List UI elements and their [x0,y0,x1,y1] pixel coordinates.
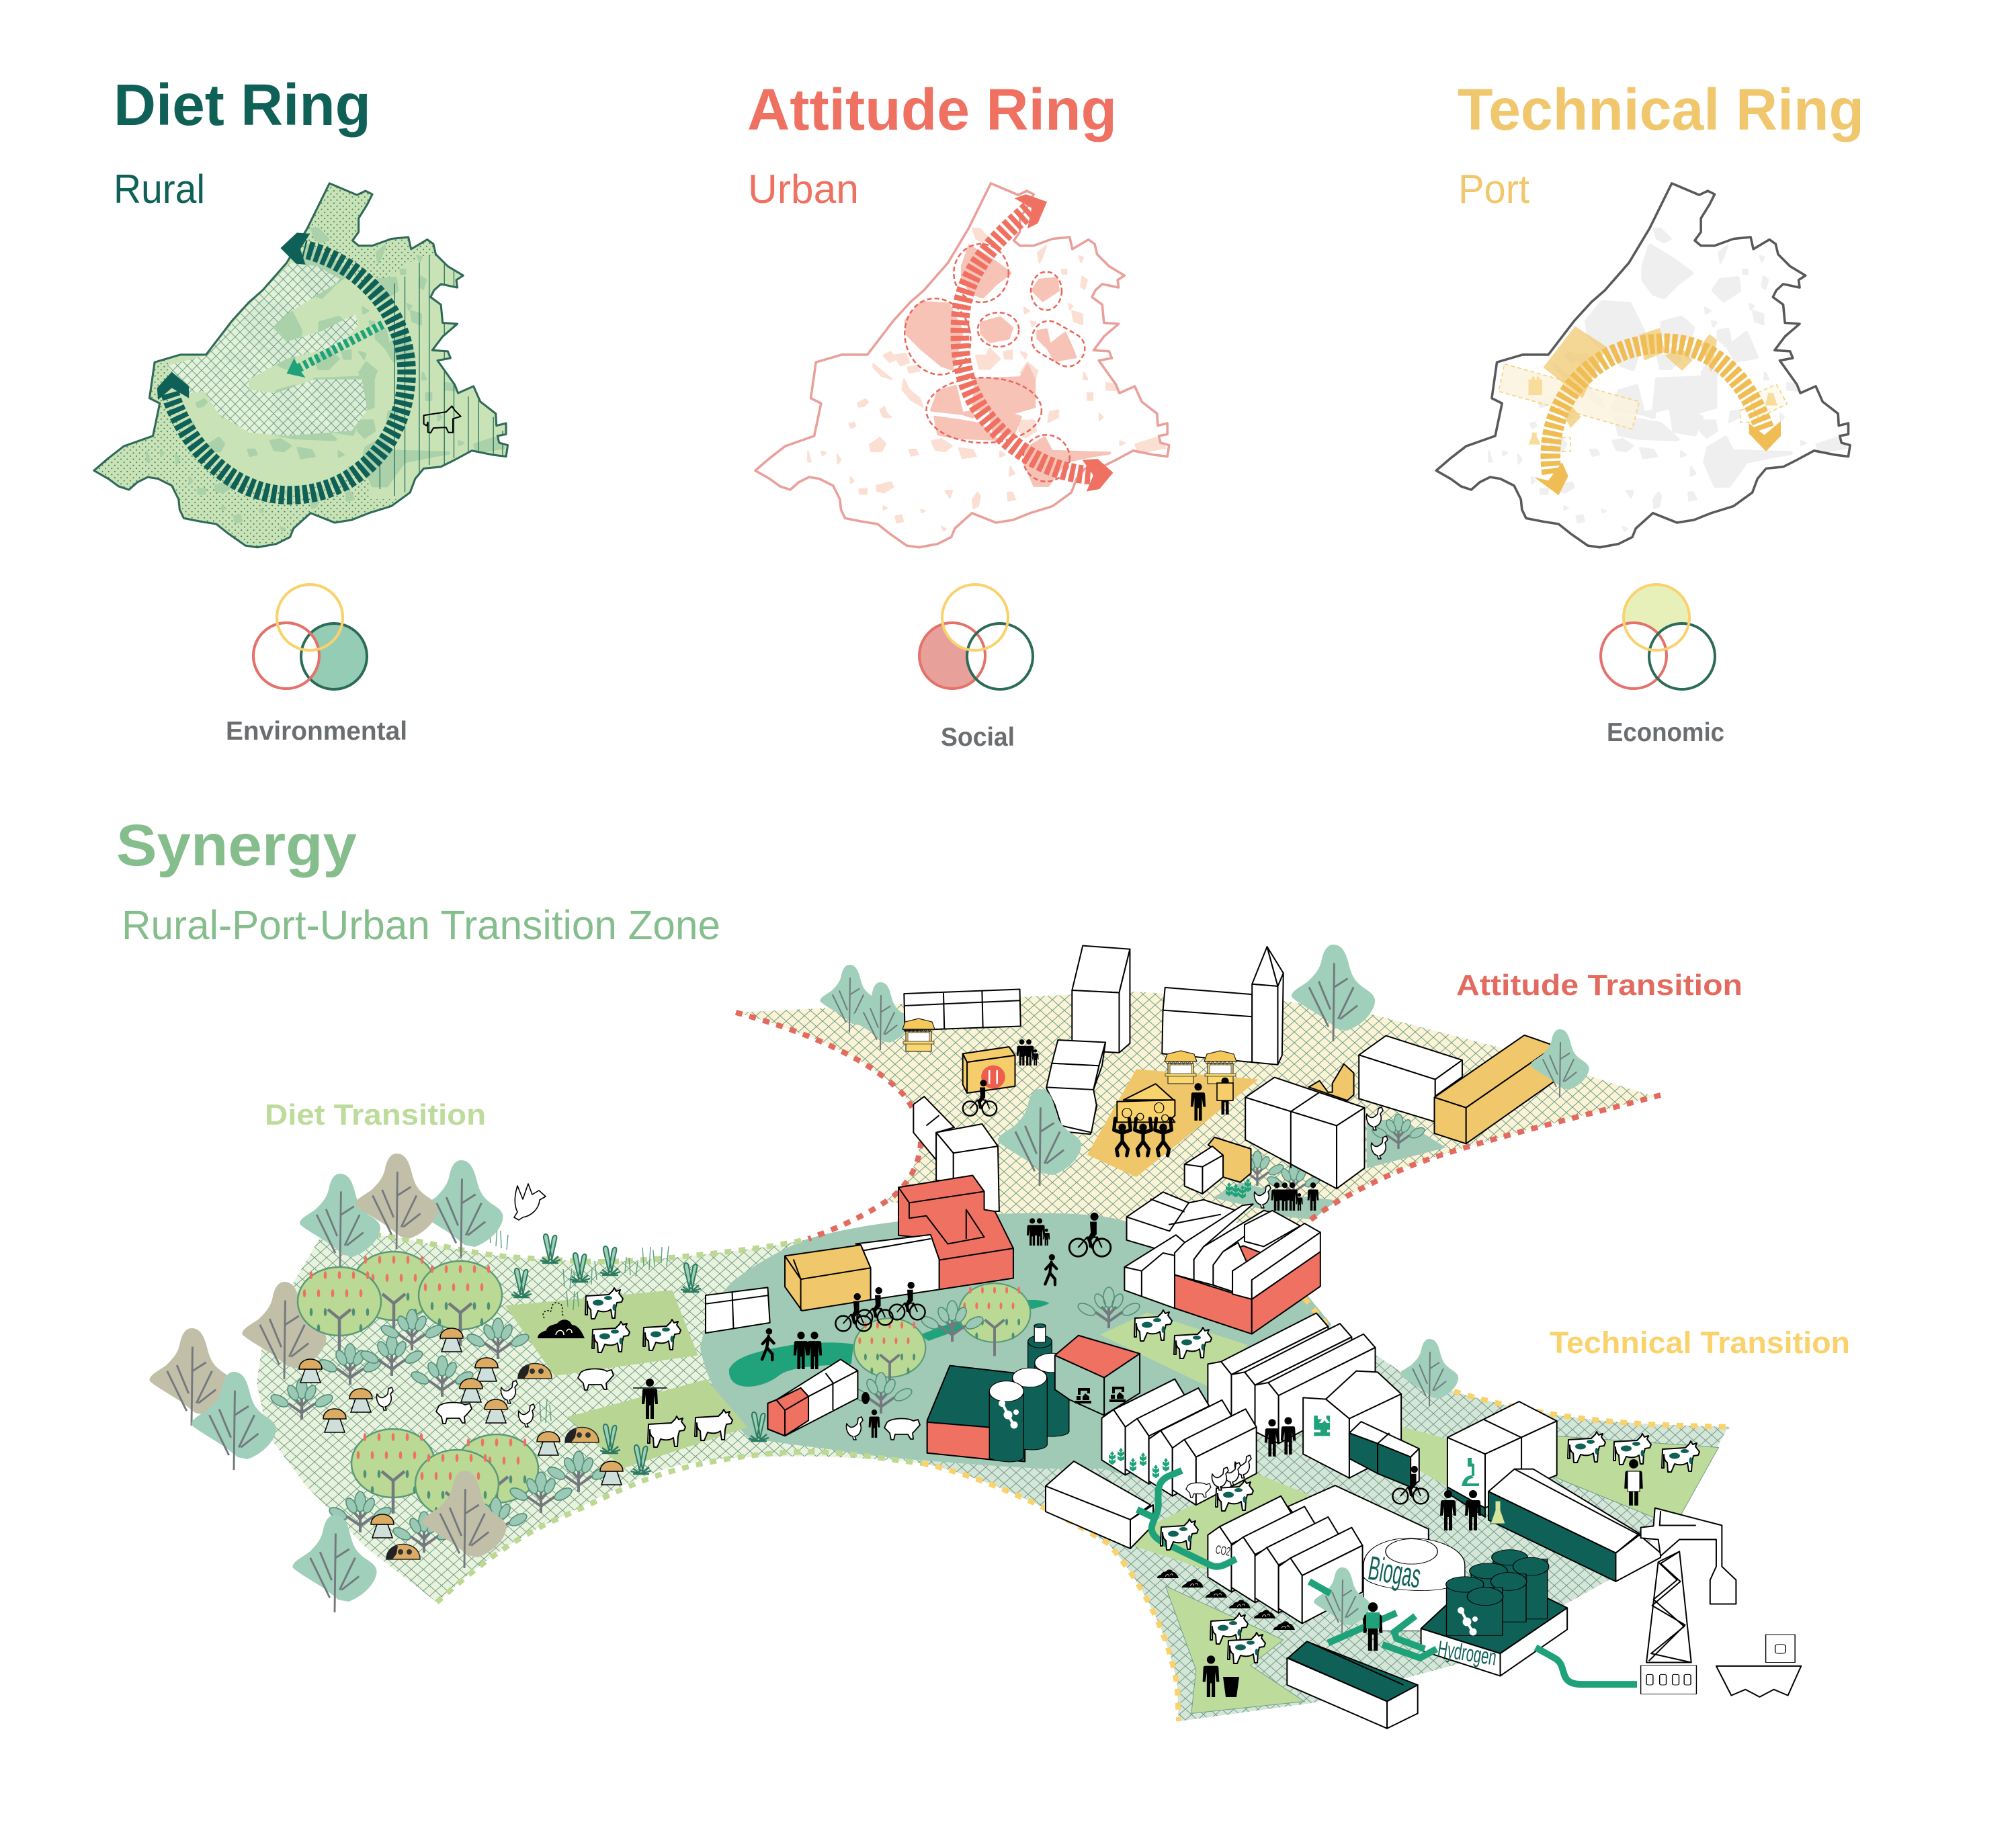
zone: technical hatch [922,1325,1731,1721]
map: urban province with corridor [755,183,1169,548]
label: Technical Transition: Technical Transition [1550,1326,1850,1360]
recycling hall [1303,1371,1401,1478]
city clusters dashed [896,244,1091,482]
subtitle: Rural: Rural [114,167,205,212]
reeds [511,1234,769,1474]
map: rural province with ring [94,183,513,548]
icon: molecule on silo [999,1400,1019,1428]
title: Diet Ring: Diet Ring [114,73,371,138]
icon: cow outline [424,406,461,433]
panel: attitude ring [747,77,1169,752]
compost heap [538,1303,585,1338]
buildings: south sheds [1101,1313,1801,1729]
label: Hydrogen: Hydrogen [1436,1636,1499,1671]
boundary: red dashes [736,1012,1661,1239]
trees: outer [150,945,1458,1470]
market stalls [902,1018,1236,1084]
heading: Synergy: Synergy [116,813,357,878]
mushrooms [299,1328,623,1538]
title: Attitude Ring: Attitude Ring [747,77,1117,142]
ship [1716,1635,1801,1697]
lab block [1447,1401,1557,1517]
buildings: east white blocks [1185,1035,1555,1194]
chimney silo [1028,1324,1052,1373]
mounds [386,1364,599,1559]
long yellow block [1434,1035,1555,1143]
ground plots and ponds [505,1290,747,1469]
hydrogen base [1421,1568,1567,1676]
label: Attitude Transition: Attitude Transition [1456,969,1742,1002]
label: CO2: CO2 [1214,1543,1231,1559]
yellow small house back [1309,1064,1354,1100]
scene: transition zone axonometric [150,945,1801,1729]
orchard [298,1252,1030,1534]
map: port province with arc [1436,183,1850,548]
title: Technical Ring: Technical Ring [1458,77,1864,142]
arrow: dark green ring [157,232,407,495]
red roof workshop [1055,1336,1140,1416]
arrow: inward green dashed [287,324,382,378]
chickens [376,1107,1388,1490]
pond and stream [729,1300,1050,1387]
restaurant [963,1047,1015,1093]
label: Biogas: Biogas [1366,1549,1424,1595]
tower block [1072,946,1130,1053]
white long shed [855,1235,939,1300]
crops [1109,1178,1251,1478]
pigs [436,1369,1211,1498]
icon: microscope [1462,1458,1479,1486]
icon: bird [514,1184,546,1220]
market square and teal courts [1087,1069,1718,1713]
farm shed [767,1359,857,1436]
label: Social: Social [941,723,1015,752]
back houses [1127,1192,1236,1254]
silos [989,1353,1069,1462]
narrow house [913,1096,999,1211]
label: Economic: Economic [1607,718,1724,747]
red court walls [1175,1246,1320,1334]
people [633,1039,1643,1697]
shrubs [269,1114,1426,1553]
zone: attitude hatch [736,992,1661,1223]
yellow long shed [785,1245,871,1311]
icon: recycling mark [1314,1416,1334,1432]
zone: central teal square [700,1213,1331,1478]
icons: molecules on hydrogen tanks [1458,1607,1478,1635]
zone: diet hatch [257,1232,941,1602]
white low shed [706,1287,770,1333]
biogas tank [1363,1538,1465,1631]
small compost heaps [1157,1569,1295,1630]
back white block [1359,1036,1462,1122]
hydrogen tanks [1446,1550,1549,1635]
tree: market [998,1089,1081,1186]
venn: environmental [253,584,367,689]
stacked blocks [1046,1040,1105,1134]
panel: diet ring [94,73,513,746]
small white and yellow house [1185,1137,1251,1194]
subheading: Rural-Port-Urban Transition Zone: Rural-Port-Urban Transition Zone [122,902,720,948]
pipes [1137,1471,1637,1684]
arrow: port arc [1534,343,1781,495]
buildings: north district [904,946,1284,1211]
row sheds co2 [1208,1496,1363,1623]
tree: front left [293,1471,507,1612]
industrial zones [1499,327,1788,451]
buildings: courtyard cluster [1124,1192,1320,1334]
tall white pair [1245,1078,1365,1188]
boundary: green dashes [374,1235,922,1602]
tree: east of yellow block [1530,1029,1589,1097]
venn: economic [1601,584,1715,689]
biogas block [927,1366,1025,1462]
crane [1641,1508,1736,1694]
church [1162,947,1284,1065]
row sheds west [1101,1379,1257,1505]
low shed south-west [1046,1461,1153,1549]
red courtyard block [898,1175,1013,1289]
subtitle: Urban: Urban [748,167,859,212]
cows [585,1288,1699,1663]
shed: white row [904,989,1021,1031]
icon: flask [1490,1501,1505,1524]
subtitle: Port: Port [1458,167,1529,212]
arrow: corridor [960,194,1114,492]
label: Environmental: Environmental [226,717,407,746]
grass tufts [489,1226,669,1423]
infographic canvas [93,82,1860,1729]
upper long sheds [1208,1313,1376,1444]
long dark shed [1488,1469,1661,1581]
dark roof shed [1287,1641,1418,1729]
gabled row [1124,1204,1320,1308]
dark shed [1349,1422,1419,1487]
venn: social [919,584,1033,689]
cheese [1117,1084,1175,1122]
boundary: yellow dashes [922,1298,1731,1721]
label: Diet Transition: Diet Transition [265,1098,486,1131]
buildings: red and yellow blocks [706,1175,1140,1462]
panel: technical ring [1436,77,1864,747]
icons: workshop machines [1075,1387,1126,1403]
tree: biogas [1314,1567,1370,1633]
biogas rear hall [1288,1485,1429,1568]
